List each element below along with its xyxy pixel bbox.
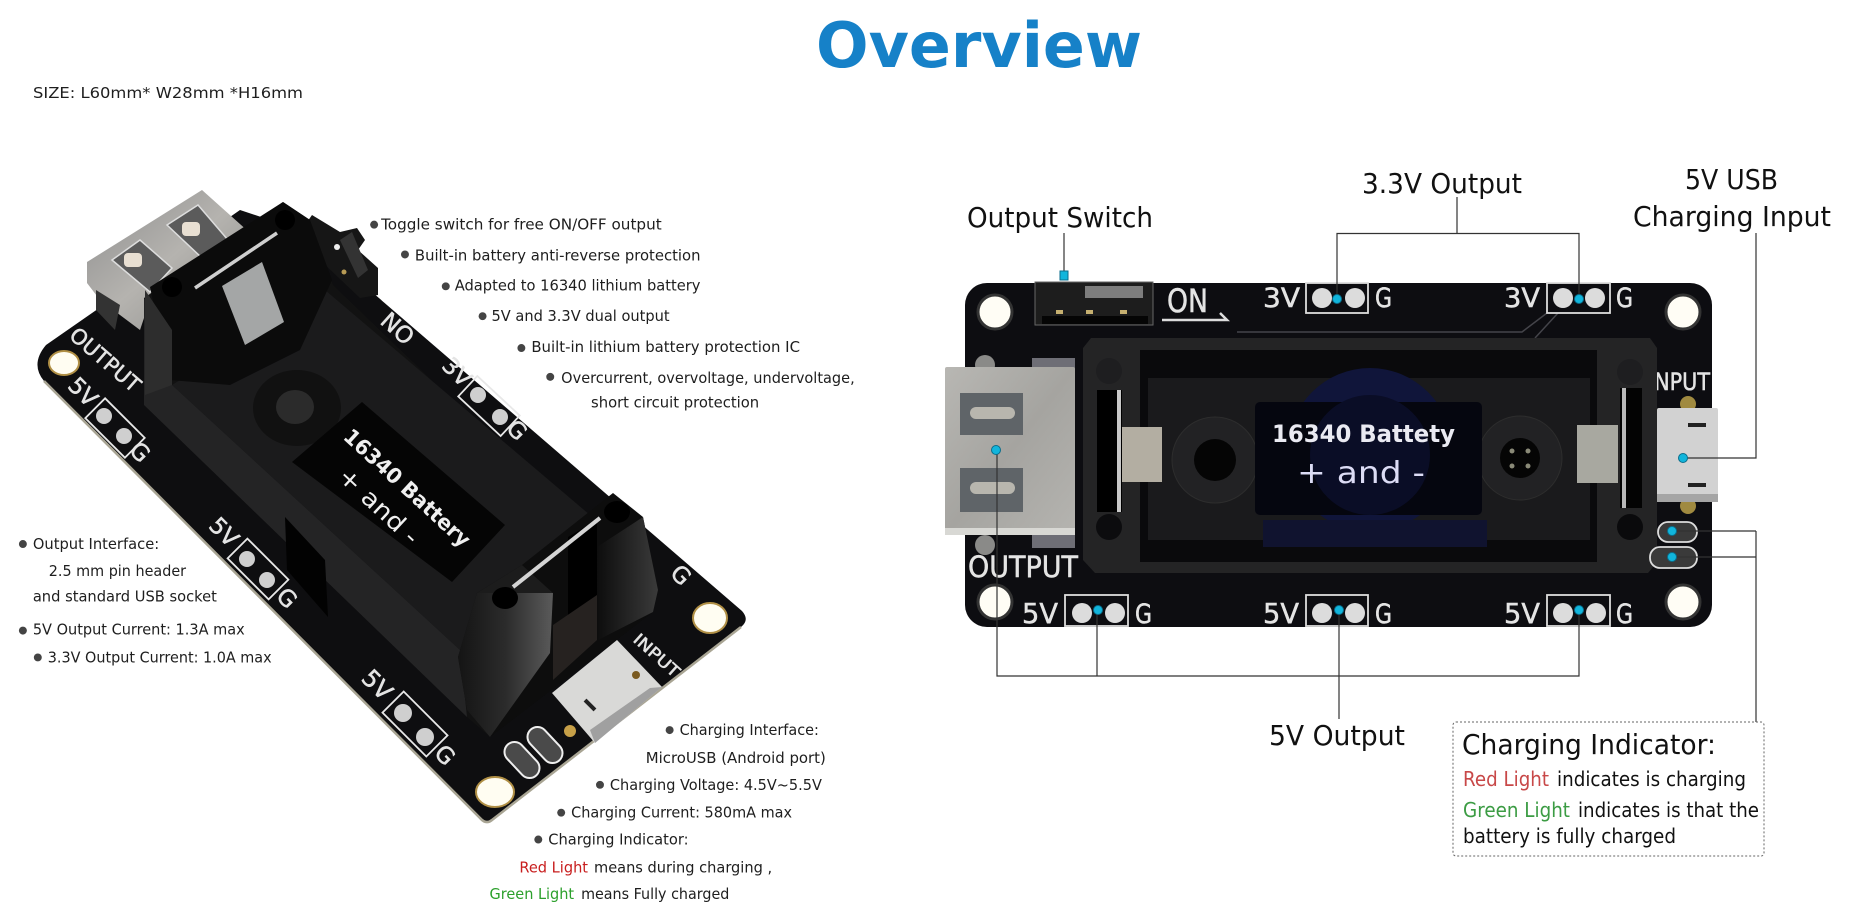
callout: charging indicator <box>1453 722 1764 856</box>
leader lines <box>997 197 1756 722</box>
board labels: G <box>1135 599 1152 630</box>
title: Overview <box>816 9 1142 82</box>
label window: + and - <box>1297 456 1425 491</box>
callout: charging indicator: Charging Indicator: <box>1462 728 1716 761</box>
label: output switch: Output Switch <box>967 201 1153 234</box>
left callouts: features: Toggle switch for free ON/OFF output <box>380 216 662 234</box>
recess right <box>1478 416 1562 500</box>
output switch <box>1035 282 1153 325</box>
left callouts: features: Built-in lithium battery protection IC <box>531 338 800 356</box>
board labels: 3V <box>436 353 476 393</box>
pad boxes <box>1065 283 1610 626</box>
watermark <box>1288 368 1452 532</box>
left callouts: charging: means during charging , <box>594 858 772 876</box>
left callouts: output: Output Interface: <box>33 535 159 553</box>
mounting holes <box>49 351 727 807</box>
left callouts: features: Overcurrent, overvoltage, undervoltage, <box>561 369 855 387</box>
callout: charging indicator: Red Light <box>1463 767 1549 791</box>
left callouts: features: Built-in battery anti-reverse protection <box>415 246 700 264</box>
marker dots <box>992 271 1688 614</box>
left callouts: charging: MicroUSB (Android port) <box>646 749 826 767</box>
board labels: 5V <box>1022 597 1058 630</box>
left callouts: charging: Red Light <box>519 858 588 876</box>
board labels: G <box>271 583 302 614</box>
left callouts: charging: Charging Indicator: <box>548 831 689 849</box>
left callouts: charging: Charging Voltage: 4.5V~5.5V <box>610 776 823 794</box>
photo: top-down board <box>945 282 1718 630</box>
board labels: G <box>501 415 532 446</box>
board labels: INPUT <box>1648 368 1710 396</box>
left callouts: output <box>19 535 272 666</box>
callout: charging indicator: indicates is charging <box>1557 767 1746 791</box>
board labels: OUTPUT <box>968 550 1078 584</box>
battery holder <box>144 202 658 737</box>
usb socket <box>87 190 250 330</box>
label: 3.3V output: 3.3V Output <box>1362 167 1522 200</box>
left callouts: charging: means Fully charged <box>581 885 729 903</box>
battery holder <box>1083 338 1657 573</box>
label: 5V USB charging input <box>1633 163 1831 233</box>
left callouts: output: 3.3V Output Current: 1.0A max <box>48 648 272 666</box>
board labels <box>62 306 696 771</box>
photo: angled board <box>37 190 746 822</box>
board labels: 5V <box>203 513 243 553</box>
left callouts: features <box>370 216 855 412</box>
left callouts: features: short circuit protection <box>591 394 759 412</box>
board labels: ON <box>377 306 420 349</box>
led windows <box>1650 522 1697 568</box>
left wall <box>144 298 467 717</box>
callout: charging indicator: Green Light <box>1463 798 1570 822</box>
label window <box>292 402 505 582</box>
pcb <box>965 283 1712 627</box>
led windows <box>500 723 567 782</box>
left callouts: charging: Charging Current: 580mA max <box>571 804 792 822</box>
board labels: G <box>1375 283 1392 314</box>
mounting holes <box>978 295 1700 619</box>
board labels: G <box>429 740 460 771</box>
micro usb port <box>1657 396 1718 514</box>
left callouts: charging: Green Light <box>490 885 574 903</box>
board labels: INPUT <box>630 630 684 681</box>
label window: 16340 Battety <box>1272 420 1455 448</box>
left callouts: output: and standard USB socket <box>33 588 217 606</box>
rear spring clip <box>222 262 284 345</box>
board labels: 5V <box>62 373 102 413</box>
left callouts: features: 5V and 3.3V dual output <box>492 307 670 325</box>
board labels: ON <box>1167 282 1208 320</box>
label window <box>1255 395 1482 515</box>
board labels: G <box>1616 283 1633 314</box>
board labels: OUTPUT <box>65 323 145 397</box>
callout: charging indicator: indicates is that the <box>1578 798 1759 822</box>
left callouts: features: Adapted to 16340 lithium battery <box>455 276 701 294</box>
recess left <box>1172 417 1258 503</box>
board labels: G <box>124 437 155 468</box>
callout: charging indicator: battery is fully charged <box>1463 824 1676 848</box>
size note: SIZE: L60mm* W28mm *H16mm <box>33 84 303 102</box>
usb socket <box>945 355 1075 555</box>
left callouts: output: 5V Output Current: 1.3A max <box>33 621 245 639</box>
label window: + and - <box>333 462 425 551</box>
traces <box>1237 313 1558 338</box>
board labels: G <box>1375 599 1392 630</box>
board labels: 5V <box>1504 597 1540 630</box>
board labels: 5V <box>356 664 399 707</box>
left callouts: charging: Charging Interface: <box>680 721 819 739</box>
pcb lower edge <box>44 381 741 822</box>
front tower <box>458 493 658 737</box>
left callouts: output: 2.5 mm pin header <box>49 562 187 580</box>
clips <box>1097 390 1122 512</box>
label window: 16340 Battery <box>339 424 475 552</box>
label: 5V output: 5V Output <box>1269 719 1405 752</box>
label: 5V USB charging input: 5V USB <box>1685 163 1778 196</box>
toggle switch <box>305 215 378 298</box>
micro usb port <box>552 640 662 743</box>
board labels: 3V <box>1263 283 1301 314</box>
left callouts: charging <box>490 721 826 903</box>
board labels: 3V <box>1504 283 1541 314</box>
silkscreen pads <box>85 376 520 757</box>
board labels <box>968 282 1710 630</box>
board labels: G <box>665 560 696 591</box>
board labels: G <box>1616 599 1633 630</box>
side slot <box>285 517 328 617</box>
board labels: 5V <box>1263 597 1299 630</box>
label: 5V USB charging input: Charging Input <box>1633 200 1831 233</box>
recess circle <box>253 370 341 446</box>
pcb <box>37 210 746 822</box>
rear tower <box>150 202 332 385</box>
cavity <box>172 290 590 650</box>
